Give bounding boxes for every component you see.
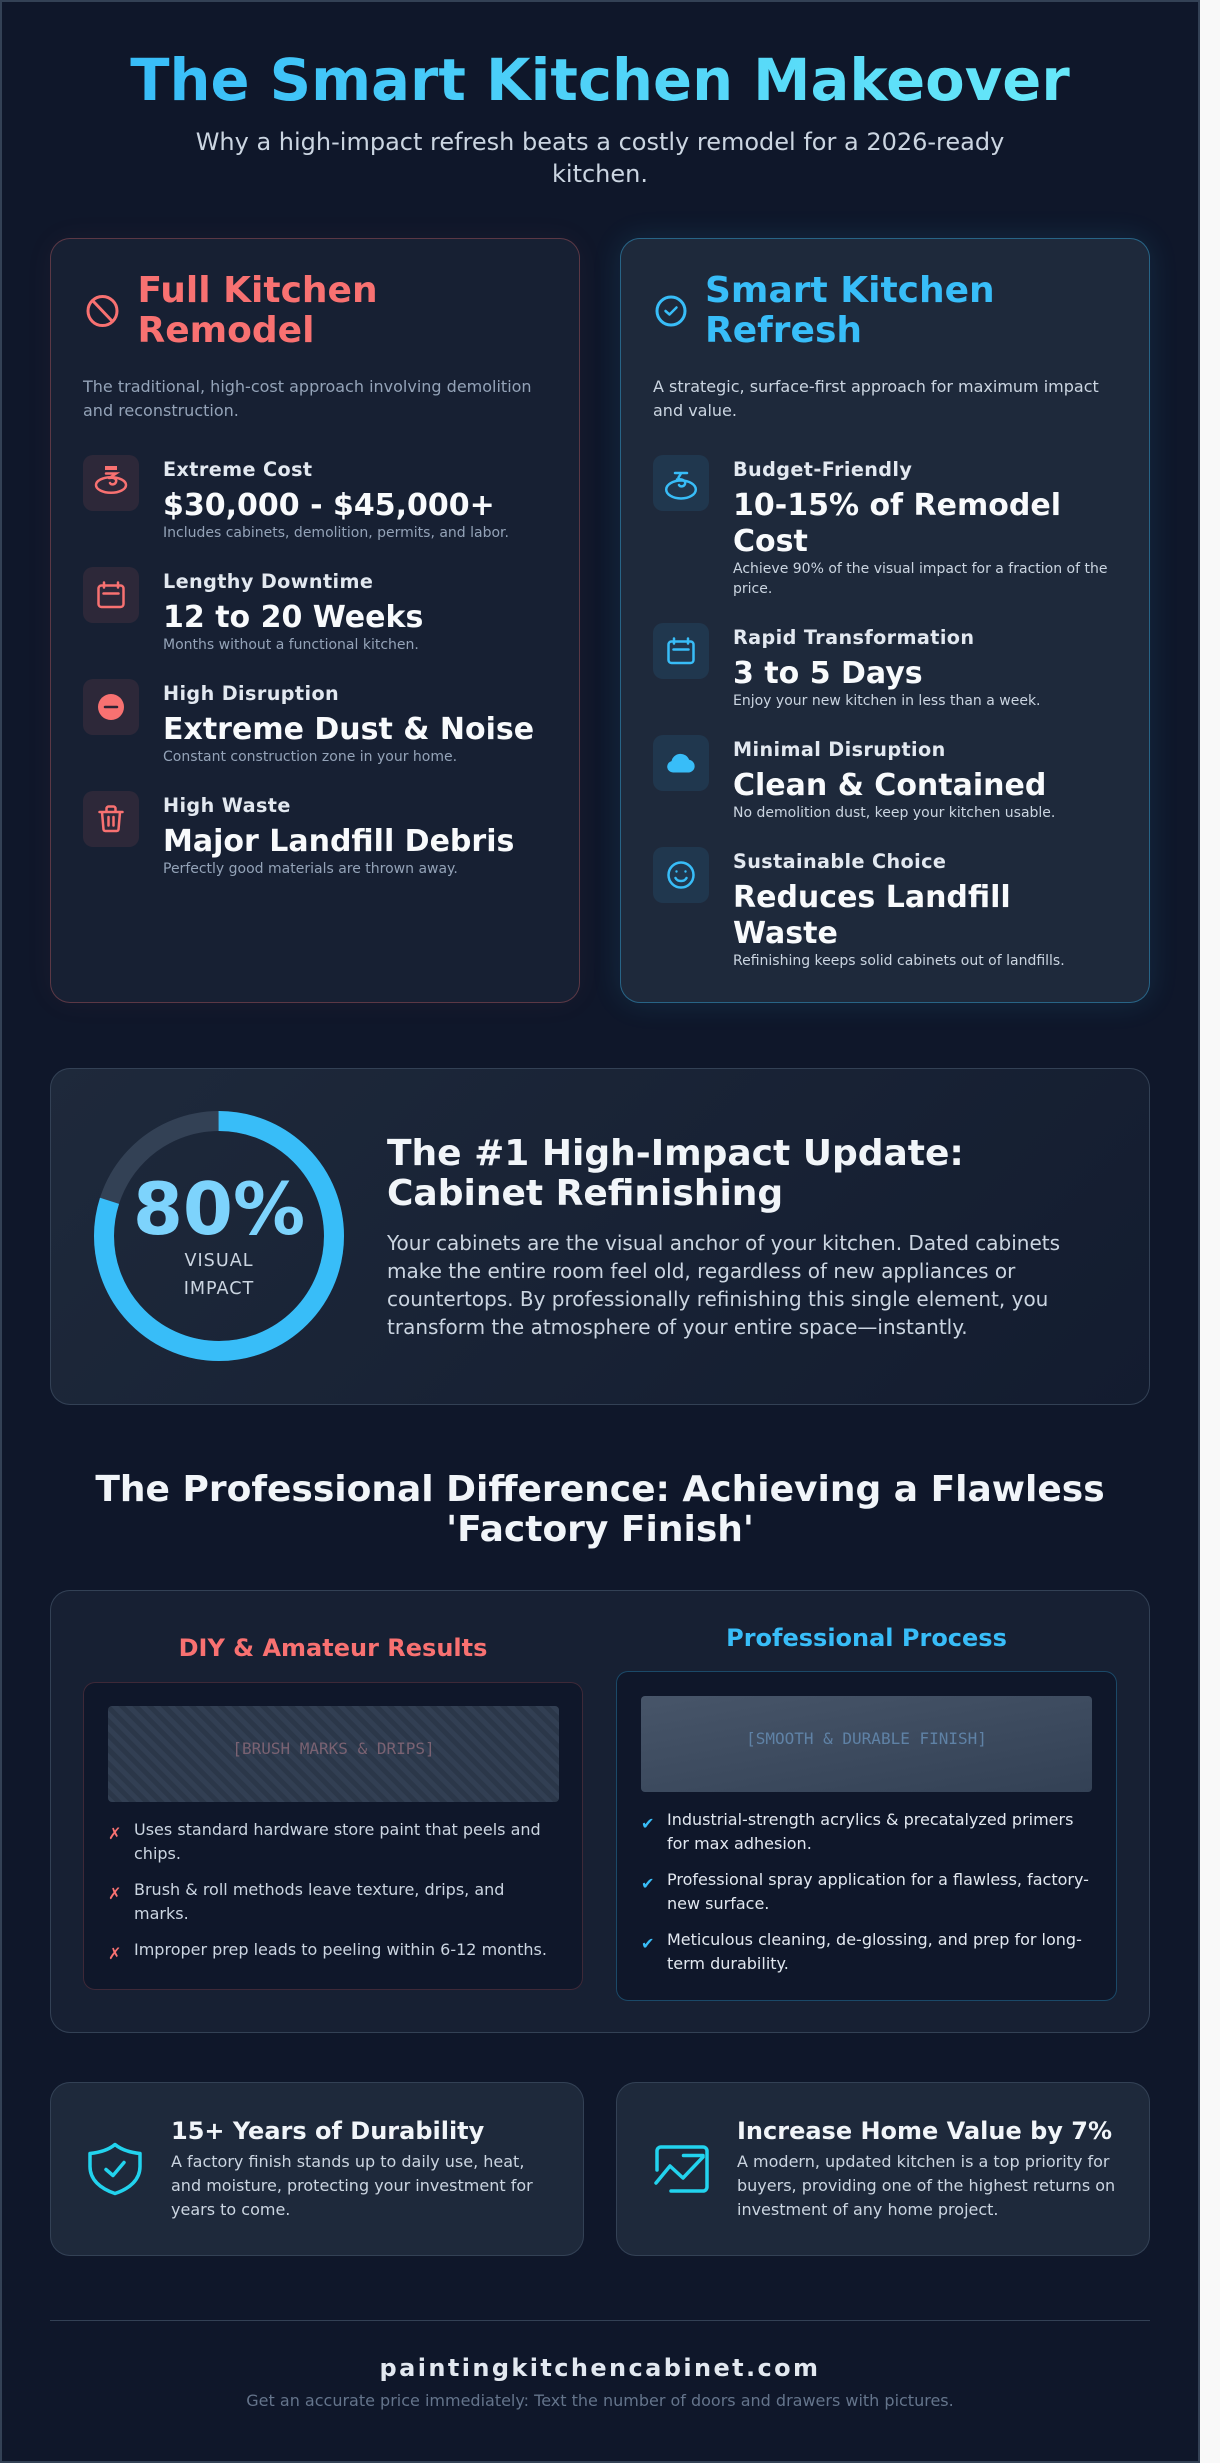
body text: investment of any home project. <box>737 2200 999 2219</box>
check mark: ✔ <box>641 1874 654 1893</box>
check mark: ✔ <box>641 1814 654 1833</box>
point 2 <box>134 1880 504 1923</box>
point 2: Professional spray application for a flawless, factory- <box>667 1870 1089 1889</box>
section heading: The Professional Difference: Achieving a Flawless <box>95 1469 1105 1510</box>
donut caption: IMPACT <box>184 1278 254 1298</box>
point 2: marks. <box>134 1904 189 1923</box>
panel: comparison <box>50 1590 1150 2033</box>
column heading: professional: Professional Process <box>726 1624 1007 1652</box>
icon: cloud <box>653 735 709 791</box>
label: Rapid Transformation <box>733 626 974 649</box>
card: diy results <box>83 1682 583 1990</box>
value: 3 to 5 Days <box>733 656 923 690</box>
column heading: diy: DIY & Amateur Results <box>179 1634 487 1662</box>
donut chart: 80% visual impact <box>94 1111 344 1361</box>
point 1: Industrial-strength acrylics & precatalyzed primers <box>667 1810 1073 1829</box>
point 3: Improper prep leads to peeling within 6-12 months. <box>134 1940 547 1959</box>
item: minimal disruption <box>653 735 1055 821</box>
label: Extreme Cost <box>163 458 312 481</box>
point 3: term durability. <box>667 1954 789 1973</box>
label: High Waste <box>163 794 291 817</box>
image placeholder: smooth finish <box>641 1696 1092 1792</box>
point 1: Uses standard hardware store paint that peels and <box>134 1820 541 1839</box>
heading: 15+ Years of Durability <box>171 2116 484 2144</box>
point 1: for max adhesion. <box>667 1834 812 1853</box>
heading <box>387 1133 964 1214</box>
heading: Cabinet Refinishing <box>387 1173 783 1214</box>
note: Months without a functional kitchen. <box>163 637 419 653</box>
value: Waste <box>733 916 838 950</box>
value <box>733 488 1061 558</box>
panel: cabinet refinishing highlight <box>50 1068 1150 1405</box>
icon: shield <box>88 2142 142 2196</box>
description <box>82 377 532 420</box>
subtitle <box>196 128 1004 188</box>
note: No demolition dust, keep your kitchen usable. <box>733 805 1055 821</box>
body text: buyers, providing one of the highest returns on <box>737 2176 1115 2195</box>
note: Enjoy your new kitchen in less than a week. <box>733 693 1041 709</box>
section heading <box>95 1469 1105 1550</box>
value: Clean & Contained <box>733 768 1046 802</box>
item: high waste <box>83 791 514 877</box>
note <box>733 561 1107 597</box>
item: budget-friendly <box>653 455 1107 597</box>
body text <box>387 1231 1060 1339</box>
icon: smile <box>653 847 709 903</box>
item: sustainable choice <box>653 847 1065 969</box>
cross mark: ✗ <box>108 1944 121 1963</box>
description: A strategic, surface-first approach for maximum impact <box>653 377 1099 396</box>
subtitle: kitchen. <box>552 160 648 188</box>
item: high disruption <box>83 679 534 765</box>
label: High Disruption <box>163 682 339 705</box>
description: and reconstruction. <box>83 401 239 420</box>
icon: money <box>83 455 139 511</box>
value: 10-15% of Remodel <box>733 488 1061 522</box>
point 3 <box>667 1930 1082 1973</box>
point 2: new surface. <box>667 1894 769 1913</box>
note: Refinishing keeps solid cabinets out of landfills. <box>733 953 1065 969</box>
value: Cost <box>733 524 808 558</box>
footer: website: paintingkitchencabinet.com <box>380 2354 820 2382</box>
icon: money <box>653 455 709 511</box>
label: Budget-Friendly <box>733 458 912 481</box>
icon: calendar <box>653 623 709 679</box>
percentage: 80% <box>133 1167 305 1251</box>
icon: growth chart <box>654 2145 709 2193</box>
body text: countertops. By professionally refinishing this single element, you <box>387 1287 1048 1311</box>
label: Lengthy Downtime <box>163 570 373 593</box>
item: extreme cost <box>83 455 509 541</box>
cross mark: ✗ <box>108 1824 121 1843</box>
icon: check circle <box>656 296 686 326</box>
point 2: Brush & roll methods leave texture, drips, and <box>134 1880 504 1899</box>
heading: full kitchen remodel <box>138 270 378 350</box>
point 1 <box>667 1810 1073 1853</box>
heading: The #1 High-Impact Update: <box>387 1133 964 1174</box>
heading: smart kitchen refresh <box>705 270 995 350</box>
icon: calendar <box>83 567 139 623</box>
cross mark: ✗ <box>108 1884 121 1903</box>
list: professional benefits <box>641 1810 1089 1973</box>
description <box>653 377 1099 420</box>
card: home value <box>616 2082 1150 2256</box>
title: The Smart Kitchen Makeover <box>130 47 1070 114</box>
check mark: ✔ <box>641 1934 654 1953</box>
description: The traditional, high-cost approach involving demolition <box>83 377 532 396</box>
body text <box>737 2152 1115 2219</box>
card: durability <box>50 2082 584 2256</box>
heading: smart kitchen refresh: Smart Kitchen <box>705 270 995 310</box>
value: 12 to 20 Weeks <box>163 600 423 634</box>
value: $30,000 - $45,000+ <box>163 488 495 522</box>
heading: smart kitchen refresh: Refresh <box>705 310 862 350</box>
item: lengthy downtime <box>83 567 423 653</box>
image placeholder: brush marks <box>108 1706 559 1802</box>
body text: A modern, updated kitchen is a top priority for <box>737 2152 1110 2171</box>
body text <box>171 2152 533 2219</box>
item: rapid transformation <box>653 623 1041 709</box>
panel: full kitchen remodel <box>50 238 580 1003</box>
body text: transform the atmosphere of your entire space—instantly. <box>387 1315 968 1339</box>
panel: smart kitchen refresh <box>620 238 1150 1003</box>
donut caption: VISUAL <box>184 1250 254 1270</box>
note: Perfectly good materials are thrown away. <box>163 861 458 877</box>
body text: years to come. <box>171 2200 290 2219</box>
body text: A factory finish stands up to daily use, heat, <box>171 2152 524 2171</box>
card: professional process <box>616 1671 1117 2001</box>
description: and value. <box>653 401 737 420</box>
donut ring <box>94 1111 344 1361</box>
body text: and moisture, protecting your investment for <box>171 2176 533 2195</box>
icon: minus circle <box>83 679 139 735</box>
body text: Your cabinets are the visual anchor of your kitchen. Dated cabinets <box>387 1231 1060 1255</box>
value: Reduces Landfill <box>733 880 1011 914</box>
subtitle: Why a high-impact refresh beats a costly remodel for a 2026-ready <box>196 128 1004 156</box>
donut caption <box>184 1250 254 1298</box>
point 2 <box>667 1870 1089 1913</box>
value: Extreme Dust & Noise <box>163 712 534 746</box>
icon: trash <box>83 791 139 847</box>
heading: full kitchen remodel: Full Kitchen <box>138 270 378 310</box>
point 1: chips. <box>134 1844 181 1863</box>
note: Constant construction zone in your home. <box>163 749 457 765</box>
note: Achieve 90% of the visual impact for a fraction of the <box>733 561 1107 577</box>
heading: Increase Home Value by 7% <box>737 2116 1112 2144</box>
point 3: Meticulous cleaning, de-glossing, and prep for long- <box>667 1930 1082 1949</box>
footer: call to action: Get an accurate price immediately: Text the number of doors and drawers with pictures. <box>246 2391 954 2410</box>
icon: ban <box>86 295 118 327</box>
note: price. <box>733 581 772 597</box>
body text: make the entire room feel old, regardless of new appliances or <box>387 1259 1015 1283</box>
placeholder label: [BRUSH MARKS & DRIPS] <box>232 1739 435 1758</box>
label: Sustainable Choice <box>733 850 946 873</box>
value <box>733 880 1011 950</box>
value: Major Landfill Debris <box>163 824 514 858</box>
section heading: 'Factory Finish' <box>446 1509 754 1550</box>
heading: full kitchen remodel: Remodel <box>138 310 314 350</box>
note: Includes cabinets, demolition, permits, and labor. <box>163 525 509 541</box>
list: diy drawbacks <box>108 1820 547 1963</box>
label: Minimal Disruption <box>733 738 946 761</box>
placeholder label: [SMOOTH & DURABLE FINISH] <box>746 1729 987 1748</box>
point 1 <box>134 1820 541 1863</box>
